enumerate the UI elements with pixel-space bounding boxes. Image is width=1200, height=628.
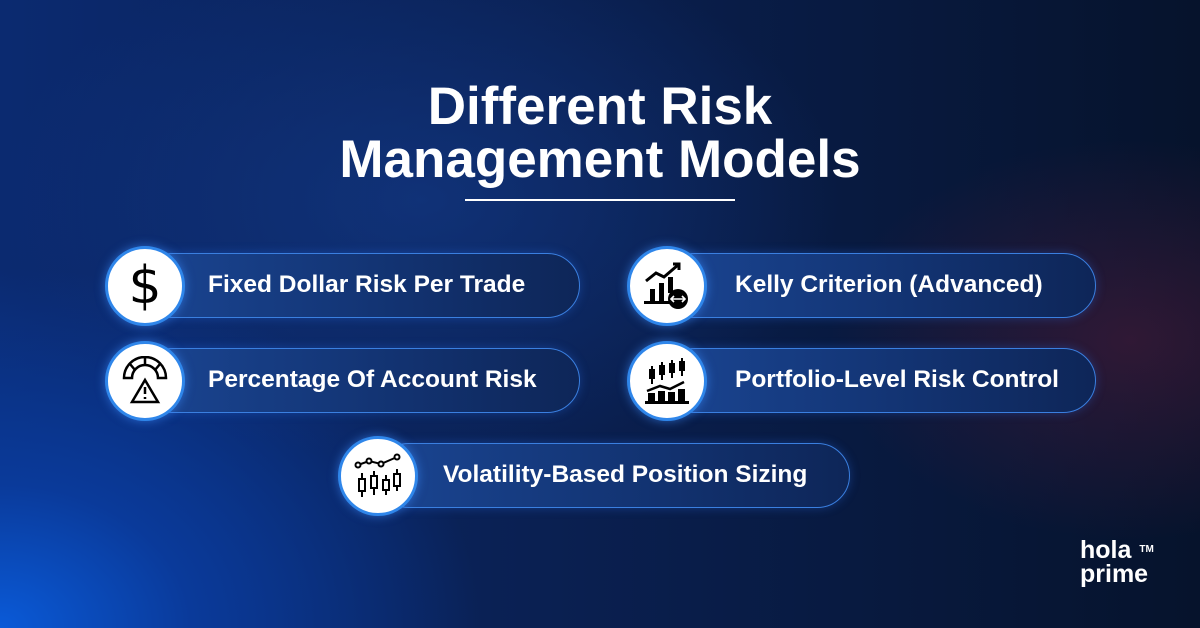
pill: kelly: Kelly Criterion (Advanced) [735, 271, 1043, 298]
logo [1080, 536, 1154, 588]
icon: dollar [105, 246, 185, 326]
title: Different Risk [428, 77, 772, 136]
icon: chart with arrows [627, 246, 707, 326]
pill: fixed dollar: Fixed Dollar Risk Per Trade [208, 271, 525, 298]
pill: kelly [662, 253, 1096, 318]
icon: candles bars [627, 341, 707, 421]
pill: volatility: Volatility-Based Position Sizing [443, 461, 807, 488]
title: Management Models [339, 130, 861, 189]
logo: hola TM [1080, 536, 1154, 564]
logo: prime [1080, 560, 1148, 588]
icon: dollar: $ [128, 256, 162, 316]
pill: fixed dollar [140, 253, 580, 318]
pill: percentage [140, 348, 580, 413]
pill: volatility [376, 443, 850, 508]
title [339, 77, 861, 189]
pill: percentage: Percentage Of Account Risk [208, 366, 537, 393]
icon: candlestick line [338, 436, 418, 516]
icon: gauge warning [105, 341, 185, 421]
pill: portfolio: Portfolio-Level Risk Control [735, 366, 1059, 393]
pill: portfolio [662, 348, 1096, 413]
